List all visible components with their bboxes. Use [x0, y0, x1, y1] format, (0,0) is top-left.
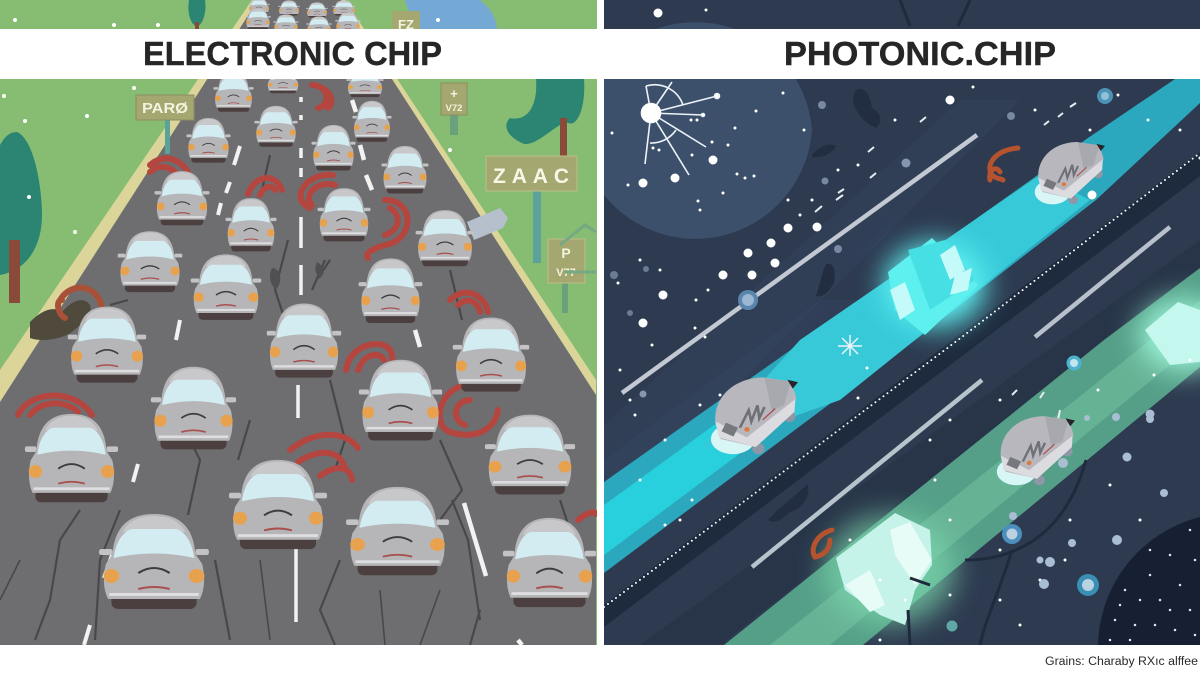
shadow creatures: [768, 89, 880, 522]
sign: V72: +: [450, 86, 458, 101]
sign: P V77: V77: [556, 267, 576, 279]
road cracks: [0, 155, 575, 645]
green crystal right: [1140, 300, 1200, 370]
source caption: Grains: Charaby RXıc alffee: [1045, 656, 1198, 668]
cyan light beam: [604, 79, 1200, 573]
darker road strip: [604, 152, 1200, 627]
short light dashes: [815, 103, 1076, 420]
sign: V72: V72: [446, 103, 462, 114]
sign: FZ: [392, 11, 420, 29]
lighter diagonal strip: [604, 100, 1020, 520]
centre and lane dashes: [84, 97, 522, 645]
pale blue orbs: [610, 101, 1168, 589]
sign: PARØ: [136, 95, 194, 154]
sign: P V77: P: [561, 245, 571, 261]
small white stars: [612, 10, 1200, 640]
tree: top right: [506, 79, 584, 158]
sun-like node with rays: [642, 82, 720, 175]
sign: ZAAC: ZAAC: [493, 165, 569, 188]
title: photonic chip: PHOTONIC.CHIP: [784, 35, 1056, 72]
dotted data line: [604, 153, 1200, 607]
sign: FZ: FZ: [398, 17, 414, 32]
green crystal chip: [825, 513, 955, 625]
shoulders: [0, 0, 596, 402]
stars in dark hole: [1110, 530, 1195, 640]
road surface: [0, 0, 596, 645]
green light beam: [724, 268, 1200, 645]
sign: P V77: [548, 239, 585, 313]
tree: left: [0, 132, 42, 303]
ringed blue orbs: [738, 88, 1113, 632]
greenhouse outline: [560, 225, 596, 272]
canister on road edge: [467, 208, 508, 240]
sign: ZAAC: [486, 156, 577, 263]
white specks on grass: [4, 20, 450, 232]
orange thermal squiggles: [813, 148, 1018, 557]
glowing planet disc: [604, 22, 812, 239]
dark space hole: [1098, 517, 1200, 645]
tree: top small: [188, 0, 206, 29]
panel: photonic chip light highway scene: [604, 0, 1200, 645]
large white stars: [643, 13, 1092, 323]
dark cracks: [900, 0, 1086, 645]
road signs: [136, 11, 585, 313]
red heat swirls: [18, 85, 596, 520]
sign: V72: [441, 83, 467, 135]
traffic jam of cars: [25, 0, 596, 609]
striped rails: [622, 135, 1170, 567]
photonic pods: [711, 142, 1105, 485]
sign: PARØ: PARØ: [142, 100, 188, 117]
dark wreck blob at road edge: [30, 300, 91, 340]
white title band: [0, 29, 1200, 79]
cyan glow: [885, 238, 985, 335]
pond: [405, 0, 497, 29]
scattered cross glyph: [838, 335, 862, 356]
title: electronic chip: ELECTRONIC CHIP: [143, 35, 442, 72]
divider strip: [597, 0, 604, 645]
panel: electronic chip highway scene: [0, 0, 597, 645]
